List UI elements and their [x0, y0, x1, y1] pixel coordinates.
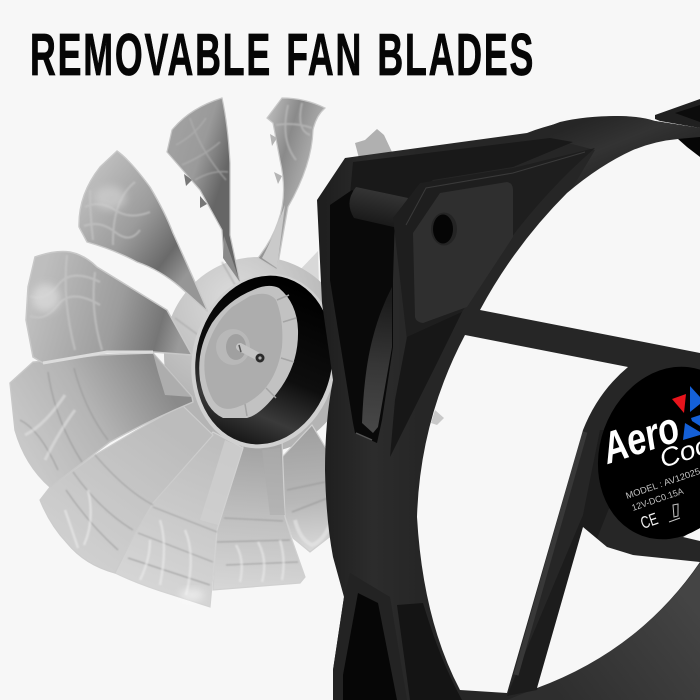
- model text: [626, 468, 700, 528]
- frame wedge under band: [678, 137, 700, 157]
- rear frame section: [507, 563, 700, 700]
- model text: CE: [638, 509, 660, 533]
- lower spoke: [507, 430, 640, 696]
- slot bottom lip: [356, 433, 372, 440]
- blade 2: [167, 98, 240, 282]
- mounting pin: [349, 187, 408, 228]
- slot inner grey wall: [362, 287, 392, 433]
- block rim highlight: [406, 152, 585, 225]
- rear blade tip behind frame: [355, 129, 392, 162]
- blade 6: [40, 405, 213, 573]
- post slot dark interior: [330, 190, 395, 443]
- frame silhouette: [317, 116, 700, 700]
- model text: 12V-DC0.15A: [630, 486, 685, 513]
- black ring and interior: [180, 263, 348, 457]
- opening: small right: [683, 527, 700, 541]
- hub fins: [175, 262, 350, 385]
- rear blade behind hub: [296, 251, 319, 285]
- centre label: [598, 366, 700, 540]
- blade fragment seen through opening: [431, 410, 444, 425]
- top frame band: [530, 116, 700, 192]
- blade 3: [79, 151, 208, 312]
- model text: MODEL : AV12025: [624, 466, 700, 501]
- corner bracket top right: [655, 99, 700, 128]
- motor shaft: [216, 329, 264, 365]
- blade 7: [115, 432, 243, 607]
- blade 4: [26, 252, 192, 363]
- title: REMOVABLE FAN BLADES: [30, 23, 535, 88]
- blade 9: [270, 425, 345, 552]
- inner disc: [199, 286, 298, 418]
- plate hole: [431, 212, 457, 246]
- bracket recess: [675, 105, 700, 122]
- blade 5: [10, 353, 193, 487]
- opening: upper: [480, 139, 700, 353]
- fan frame: [317, 99, 700, 700]
- logo wordmark: [607, 420, 700, 466]
- hub dome: [164, 257, 352, 453]
- bottom post outline: [333, 573, 407, 700]
- block shadow wedge: [390, 312, 462, 457]
- blade 1: [258, 98, 325, 270]
- fan impeller: [10, 98, 392, 607]
- inner block: [393, 148, 595, 440]
- bottom post opening: [343, 593, 397, 700]
- opening: lower: [537, 527, 700, 688]
- upper recess: [350, 138, 573, 200]
- blade 8: [213, 440, 305, 590]
- opening: centre: [417, 335, 628, 693]
- logo triangles: [672, 386, 700, 440]
- recycling symbol: [669, 504, 680, 522]
- label disc: [574, 346, 700, 560]
- lower right frame shadow: [397, 603, 462, 700]
- hub opening rim: [175, 260, 353, 462]
- mounting plate: [413, 182, 513, 323]
